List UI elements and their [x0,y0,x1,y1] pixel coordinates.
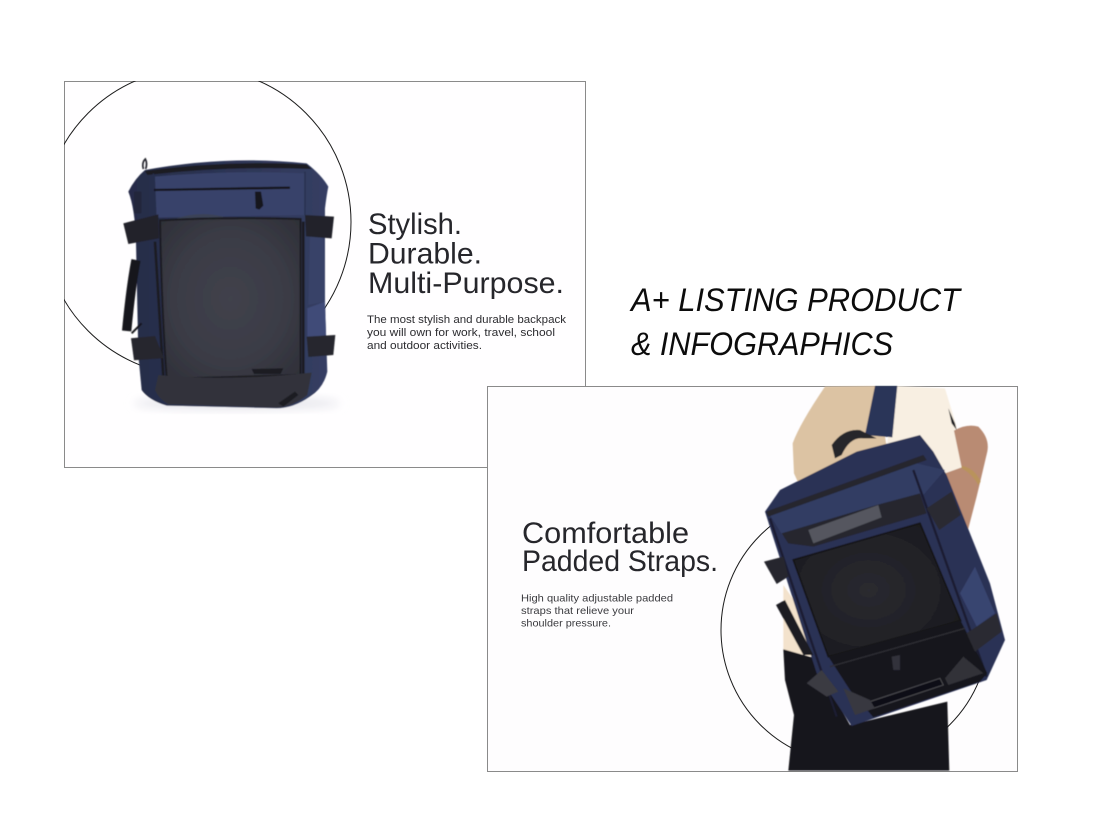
body text: straps description: shoulder pressure. [521,618,611,630]
bottom band [155,373,312,408]
heading: comfortable padded straps [522,517,718,578]
leather front pocket [160,218,301,379]
side handle [127,260,136,331]
heading: stylish durable multi-purpose: Stylish. [368,208,462,241]
image: model wearing navy backpack [764,386,1005,771]
bag body [765,435,1005,726]
heading: comfortable padded straps: Comfortable [522,517,689,550]
title: A+ listing product and infographics: & INFOGRAPHICS [631,326,893,362]
top handle strap [782,493,927,547]
heading: stylish durable multi-purpose [368,208,564,300]
leather pocket [793,523,961,657]
body text: straps description [521,592,673,630]
title: A+ listing product and infographics: A+ LISTING PRODUCT [629,282,962,318]
circle outline behind model [720,526,979,748]
straps and buckles [123,214,159,244]
heading: comfortable padded straps: Padded Straps. [522,545,718,578]
body text: backpack description: you will own for work, travel, school [367,327,555,339]
side straps and buckles [927,492,961,530]
body text: backpack description: The most stylish and durable backpack [367,314,567,326]
panel: comfortable padded straps [488,386,1018,772]
trousers [783,649,949,771]
circle outline behind backpack [64,81,352,366]
body text: straps description: straps that relieve your [521,605,635,617]
image: navy backpack front view [123,159,340,410]
body text: backpack description: and outdoor activities. [367,340,482,352]
body text: straps description: High quality adjustable padded [521,592,673,604]
heading: stylish durable multi-purpose: Multi-Purpose. [368,267,564,300]
title: A+ listing product and infographics [629,282,962,362]
body text: backpack description [367,314,567,352]
panel: stylish backpack [43,68,586,468]
heading: stylish durable multi-purpose: Durable. [368,238,482,270]
